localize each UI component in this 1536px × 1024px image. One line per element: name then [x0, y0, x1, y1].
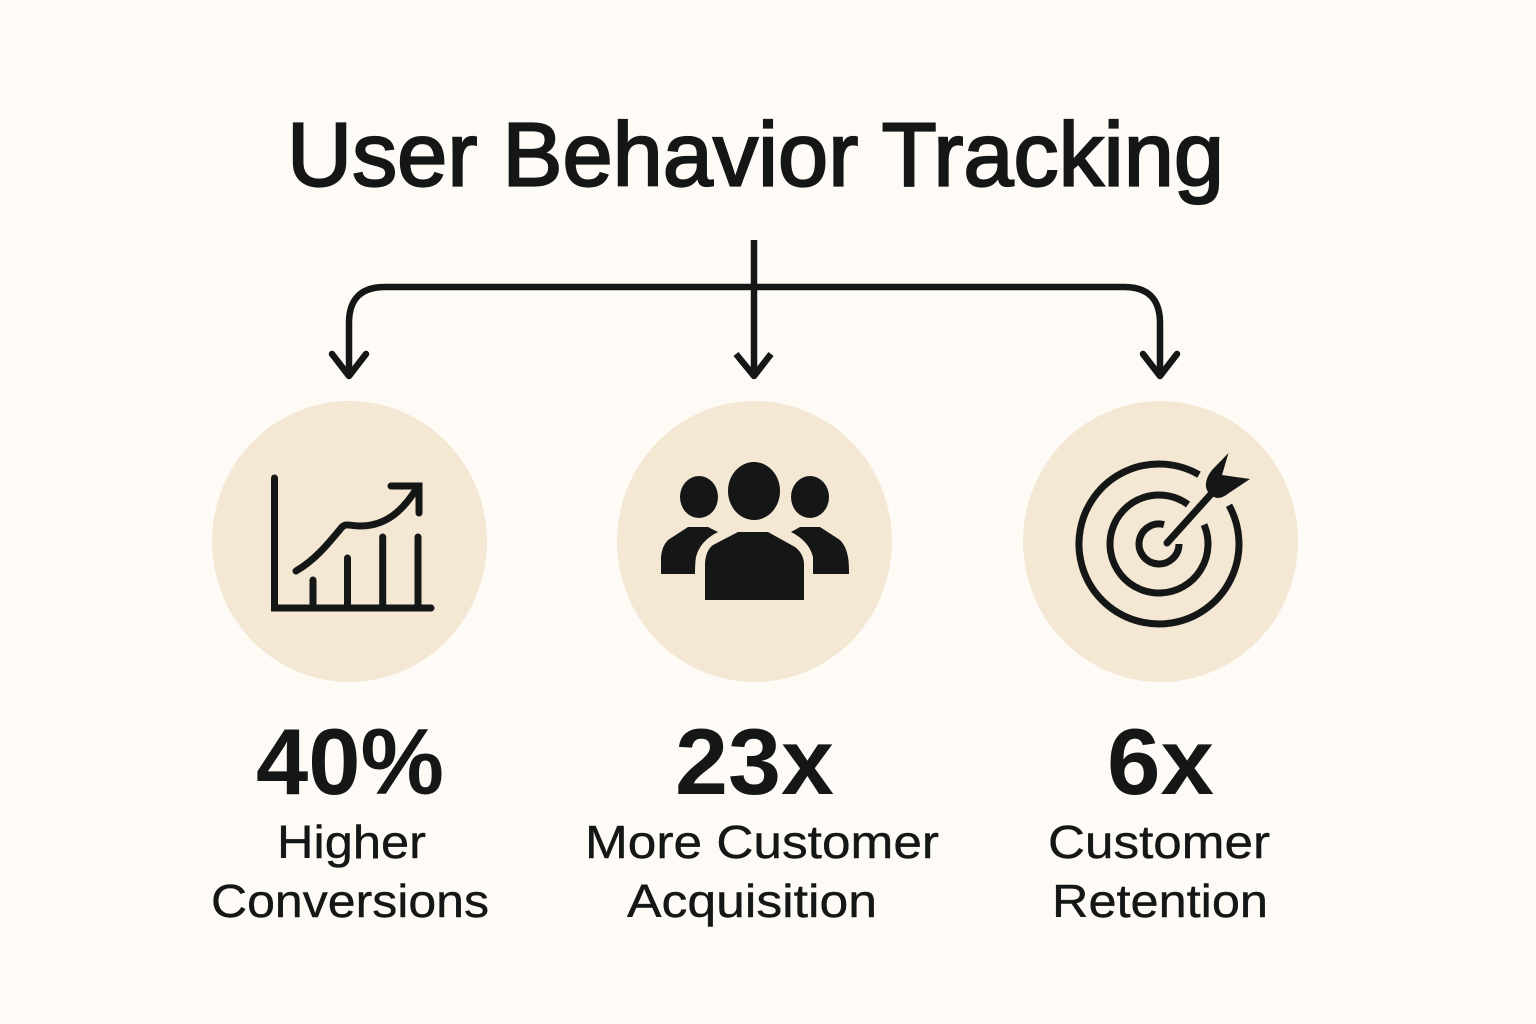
label: More Customer Acquisition — [585, 816, 939, 927]
panel: customer retention — [1023, 401, 1298, 927]
circle background — [212, 401, 487, 682]
label: Customer Retention — [1048, 816, 1270, 927]
label: Customer Retention: Customer — [1048, 816, 1270, 868]
stat: 40%: 40% — [256, 709, 444, 814]
label: Customer Retention: Retention — [1052, 875, 1268, 927]
icon: target with arrow — [1079, 453, 1250, 624]
stat: 6x: 6x — [1107, 709, 1214, 814]
icon: growth chart — [274, 478, 431, 608]
label: Higher Conversions — [211, 816, 489, 927]
label: More Customer Acquisition: Acquisition — [627, 875, 877, 927]
circle background — [1023, 401, 1298, 682]
circle background — [617, 401, 892, 682]
panel: more customer acquisition — [585, 401, 939, 927]
stat: 23x: 23x — [675, 709, 834, 814]
flow arrows: tracking splits into three outcomes — [332, 240, 1177, 376]
arrow: branch to right — [754, 287, 1177, 376]
panel: higher conversions — [211, 401, 489, 927]
title: User Behavior Tracking — [287, 106, 1224, 206]
arrow: centre stem — [736, 240, 771, 376]
label: Higher Conversions: Higher — [277, 816, 426, 868]
arrow: branch to left — [332, 287, 754, 376]
label: Higher Conversions: Conversions — [211, 875, 489, 927]
label: More Customer Acquisition: More Customer — [585, 816, 939, 868]
icon: group of people — [661, 462, 849, 600]
